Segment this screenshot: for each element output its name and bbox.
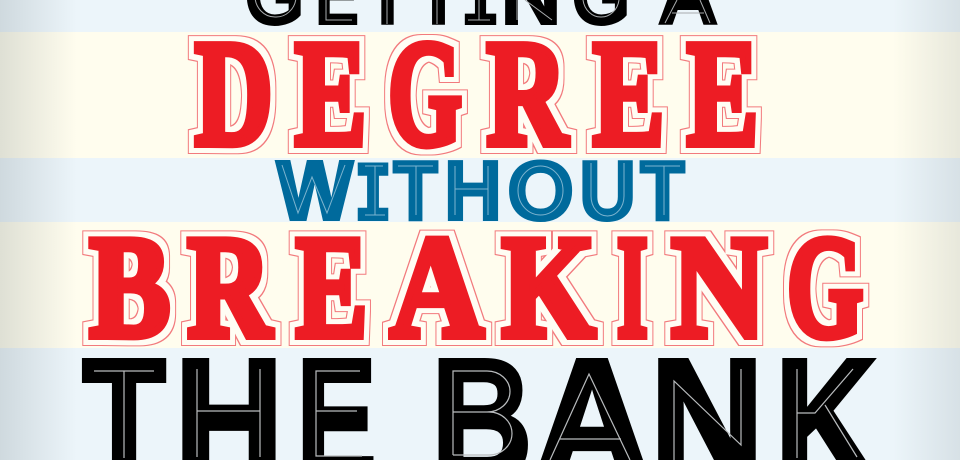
title word: DEGREE: D <box>195 9 273 177</box>
title word: BREAKING: G <box>787 206 863 368</box>
title word: WITHOUT: T <box>394 144 438 237</box>
title word: WITHOUT: T <box>640 144 684 237</box>
title word: WITHOUT <box>277 144 684 244</box>
title word: DEGREE: E <box>295 9 366 177</box>
title word: DEGREE <box>195 9 758 177</box>
title word: BREAKING: I <box>617 206 648 368</box>
title word: WITHOUT: W <box>277 144 353 237</box>
title word: WITHOUT: I <box>354 150 392 244</box>
title word: GETTING A <box>244 0 718 50</box>
title word: BREAKING: A <box>390 206 484 368</box>
title word: WITHOUT: H <box>444 144 502 237</box>
title word: WITHOUT: O <box>508 144 574 237</box>
title word: BREAKING: E <box>296 206 367 368</box>
title words: THE BANK <box>83 325 876 460</box>
title word: WITHOUT: U <box>580 144 636 237</box>
title word: DEGREE: E <box>687 9 758 177</box>
title word: BREAKING: B <box>90 206 170 368</box>
title word: BREAKING: N <box>671 206 766 368</box>
title word: BREAKING <box>90 206 863 368</box>
title word: DEGREE: E <box>593 9 664 177</box>
title word: BREAKING: R <box>188 206 273 368</box>
title word: BREAKING: K <box>502 206 596 368</box>
title word: DEGREE: R <box>487 9 569 177</box>
title word: DEGREE: G <box>388 9 462 177</box>
